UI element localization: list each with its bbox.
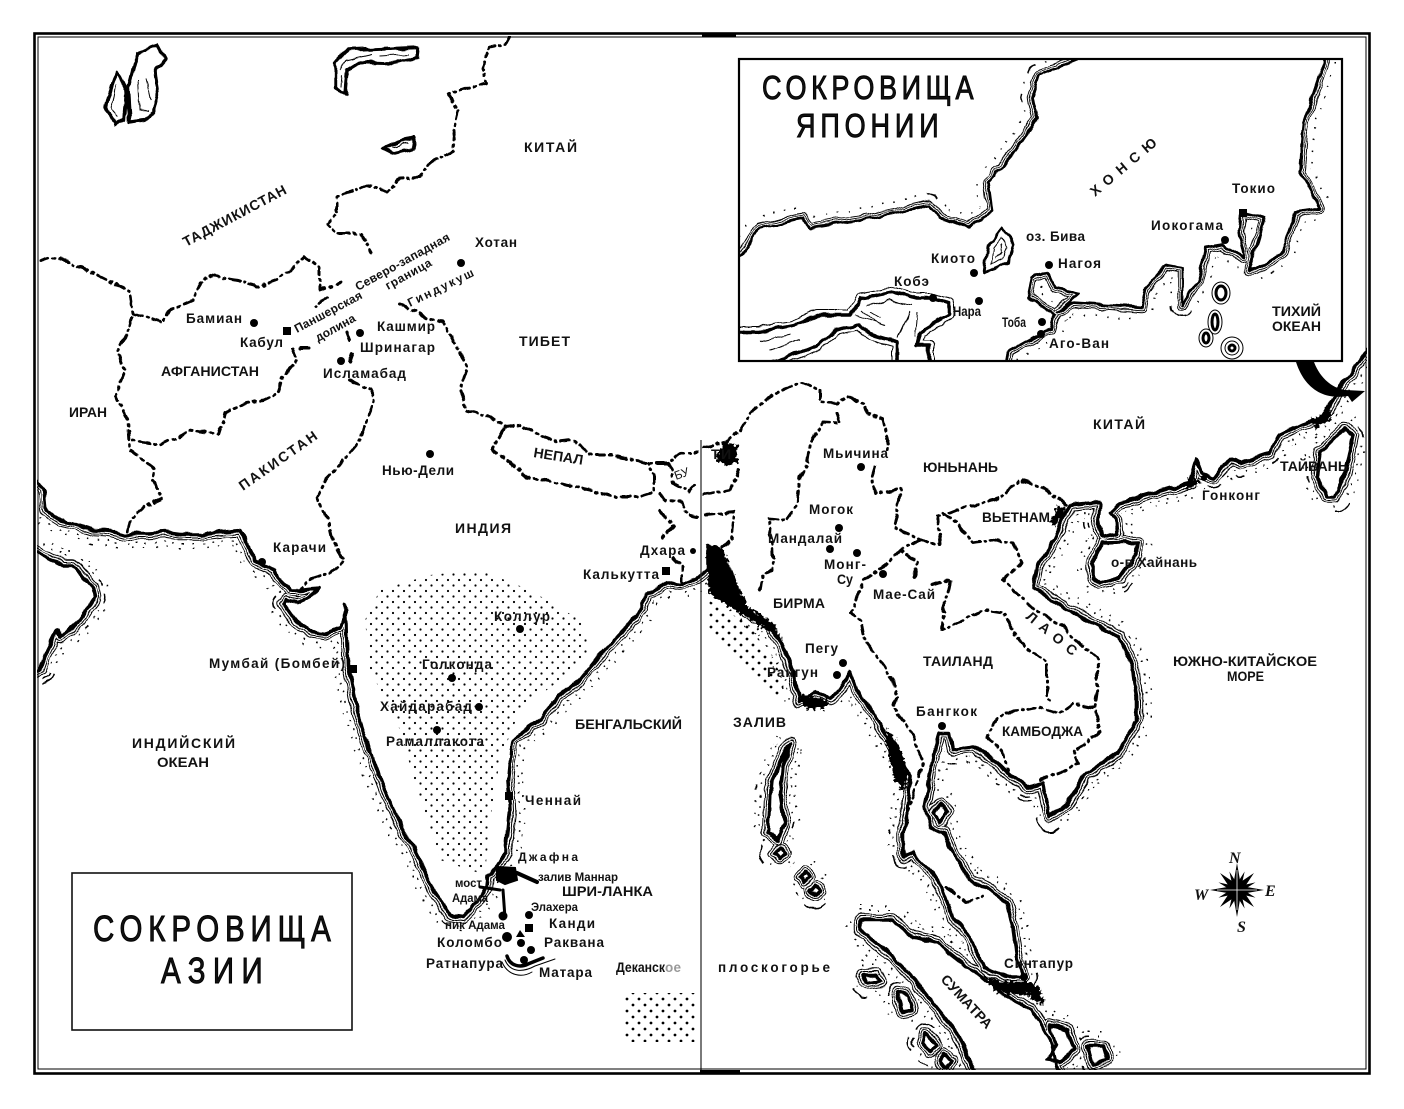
labels: India: Хайдарабад (380, 699, 472, 714)
labels: Sri Lanka: Элахера (531, 900, 578, 914)
labels: central and western Asia: Кашмир (377, 319, 435, 334)
Pacific islets (1199, 282, 1243, 359)
labels: India: ИНДИЙСКИЙ (132, 734, 235, 751)
labels: Southeast Asia: о-в Хайнань (1111, 555, 1197, 570)
inset place labels (894, 134, 1321, 351)
labels: central and western Asia: ТАДЖИКИСТАН (180, 182, 289, 250)
labels: Southeast Asia: КАМБОДЖА (1002, 723, 1083, 739)
labels: India: Коллур (494, 609, 550, 624)
labels: central and western Asia: ИНДИЯ (455, 520, 511, 536)
labels: central and western Asia: ТИБЕТ (519, 333, 570, 349)
labels: central and western Asia (69, 138, 731, 536)
icon: compass rose: S (1237, 919, 1246, 936)
labels: central and western Asia: долина (313, 311, 358, 345)
labels: central and western Asia: Гиндукуш (405, 266, 476, 310)
inset title (762, 71, 974, 145)
title box: treasures of Asia: СОКРОВИЩА (93, 908, 331, 949)
labels: central and western Asia: Исламабад (323, 366, 406, 381)
title box: treasures of Asia (72, 873, 352, 1030)
labels: India: Калькутта (583, 567, 659, 582)
inset place labels: Нара (953, 304, 981, 319)
labels: central and western Asia: НЕПАЛ (533, 444, 584, 468)
labels: Sri Lanka: ШРИ-ЛАНКА (562, 883, 653, 899)
Sri Lanka and Adam's Bridge shore (480, 867, 555, 975)
inset place labels: ХОНСЮ (1087, 134, 1160, 199)
labels: Southeast Asia: Сингапур (1004, 956, 1073, 971)
labels: Sri Lanka: Канди (549, 916, 595, 931)
labels: India: ОКЕАН (157, 754, 209, 770)
labels: Southeast Asia: СУМАТРА (938, 971, 996, 1032)
labels: Southeast Asia: ЮЖНО-КИТАЙСКОЕ (1173, 652, 1317, 669)
labels: central and western Asia: Нью-Дели (382, 463, 454, 478)
Deccan plateau stipple (365, 570, 590, 875)
labels: Southeast Asia: ТАЙВАНЬ (1280, 457, 1348, 474)
labels: Sri Lanka: Джафна (518, 850, 578, 864)
inset place labels: ОКЕАН (1272, 319, 1321, 334)
labels: central and western Asia: БУ (672, 464, 691, 483)
city markers (250, 259, 1207, 981)
plateau legend swatch (625, 993, 697, 1042)
labels: central and western Asia: АФГАНИСТАН (161, 363, 259, 379)
labels: Sri Lanka: Ратнапура (426, 956, 503, 971)
Lake Biwa (984, 228, 1014, 273)
labels: India: Рамаллакота (386, 734, 484, 749)
inset title: ЯПОНИИ (796, 109, 939, 145)
inset place labels: Аго-Ван (1049, 336, 1109, 351)
icon: compass rose: N (1228, 850, 1242, 867)
Kobe and inland sea shore (740, 286, 954, 360)
labels: central and western Asia: ПАКИСТАН (236, 428, 320, 493)
title box: treasures of Asia: АЗИИ (161, 950, 263, 991)
labels: central and western Asia: Бамиан (186, 311, 242, 326)
sea stipple off the Irrawaddy delta (710, 602, 784, 694)
labels: India: Голконда (422, 657, 492, 672)
labels: Southeast Asia: Мьичина (823, 446, 888, 461)
labels: Sri Lanka: Матара (539, 965, 592, 980)
labels: Sri Lanka: ое (665, 960, 681, 975)
labels: Southeast Asia: Могок (809, 502, 853, 517)
labels: central and western Asia: Кабул (240, 335, 283, 350)
coastlines and islands with contour lines (37, 348, 1367, 1070)
gutter line between pages (700, 440, 702, 1070)
labels: Southeast Asia: ЮНЬНАНЬ (923, 459, 998, 475)
labels: Southeast Asia: Рангун (767, 665, 818, 680)
labels: Southeast Asia: ВЬЕТНАМ (982, 509, 1050, 525)
labels: Southeast Asia: Су (837, 572, 853, 587)
labels: Southeast Asia: МОРЕ (1227, 668, 1264, 684)
inset place labels: Нагоя (1058, 256, 1101, 271)
labels: Southeast Asia: БИРМА (773, 595, 825, 611)
labels: central and western Asia: КИТАЙ (524, 138, 577, 155)
labels: Sri Lanka (426, 850, 830, 980)
labels: central and western Asia: Паншерская (292, 288, 365, 336)
Aral Sea (106, 45, 165, 125)
labels: Sri Lanka: залив Маннар (538, 870, 618, 884)
labels: Southeast Asia: Монг- (824, 557, 866, 572)
labels: Southeast Asia: Бангкок (916, 704, 977, 719)
labels: Sri Lanka: Коломбо (437, 935, 502, 950)
icon: compass rose: E (1264, 883, 1276, 900)
labels: Southeast Asia (767, 415, 1348, 1032)
icon: compass rose (1194, 850, 1276, 936)
labels: India: Мумбай (Бомбей) (209, 656, 345, 671)
Lake Issyk-Kul (383, 138, 415, 153)
labels: central and western Asia: Хотан (475, 235, 517, 250)
Honshu coast (740, 60, 1336, 360)
inset place labels: Токио (1232, 181, 1275, 196)
Lake Balkhash (335, 47, 418, 93)
panel: Japan inset map (738, 58, 1344, 362)
labels: Southeast Asia: Мандалай (768, 531, 842, 546)
political borders (40, 36, 1100, 902)
labels: Sri Lanka: мост (455, 876, 482, 890)
labels: central and western Asia: ИРАН (69, 404, 107, 420)
inset place labels: Кобэ (894, 274, 929, 289)
labels: India: Карачи (273, 540, 326, 555)
labels: Sri Lanka: плоскогорье (718, 960, 830, 975)
labels: central and western Asia: ТИ (711, 446, 731, 462)
labels: Sri Lanka: пик Адама (445, 918, 505, 932)
inset place labels: Киото (931, 251, 975, 266)
labels: India: Дхара (640, 543, 685, 558)
labels: Sri Lanka: Раквана (544, 935, 604, 950)
inset city markers (929, 209, 1247, 338)
dark delta and archipelago masses (707, 410, 1332, 1005)
inset place labels: Тоба (1002, 315, 1026, 330)
labels: central and western Asia: Северо-западная (353, 230, 452, 294)
labels: central and western Asia: Шринагар (360, 340, 435, 355)
inset frame (739, 59, 1342, 361)
labels: Sri Lanka: Деканск (616, 960, 665, 975)
inset place labels: Иокогама (1151, 218, 1223, 233)
inset title: СОКРОВИЩА (762, 71, 974, 107)
labels: India: ЗАЛИВ (733, 714, 786, 730)
labels: Southeast Asia: Пегу (805, 641, 838, 656)
arrow from China coast to Japan inset (1296, 362, 1365, 402)
labels: Southeast Asia: КИТАЙ (1093, 415, 1145, 432)
labels: Southeast Asia: Мае-Сай (873, 587, 935, 602)
labels: India (132, 540, 786, 808)
inset place labels: ТИХИЙ (1272, 304, 1321, 319)
labels: central and western Asia: граница (383, 256, 434, 293)
labels: Sri Lanka: Адама (452, 891, 488, 905)
icon: compass rose: W (1194, 887, 1210, 904)
labels: Southeast Asia: ЛАОС (1023, 608, 1081, 659)
labels: Southeast Asia: Гонконг (1202, 488, 1260, 503)
labels: India: Ченнай (525, 793, 581, 808)
inset place labels: оз. Бива (1026, 229, 1085, 244)
labels: India: БЕНГАЛЬСКИЙ (575, 715, 682, 732)
labels: Southeast Asia: ТАИЛАНД (923, 653, 993, 669)
